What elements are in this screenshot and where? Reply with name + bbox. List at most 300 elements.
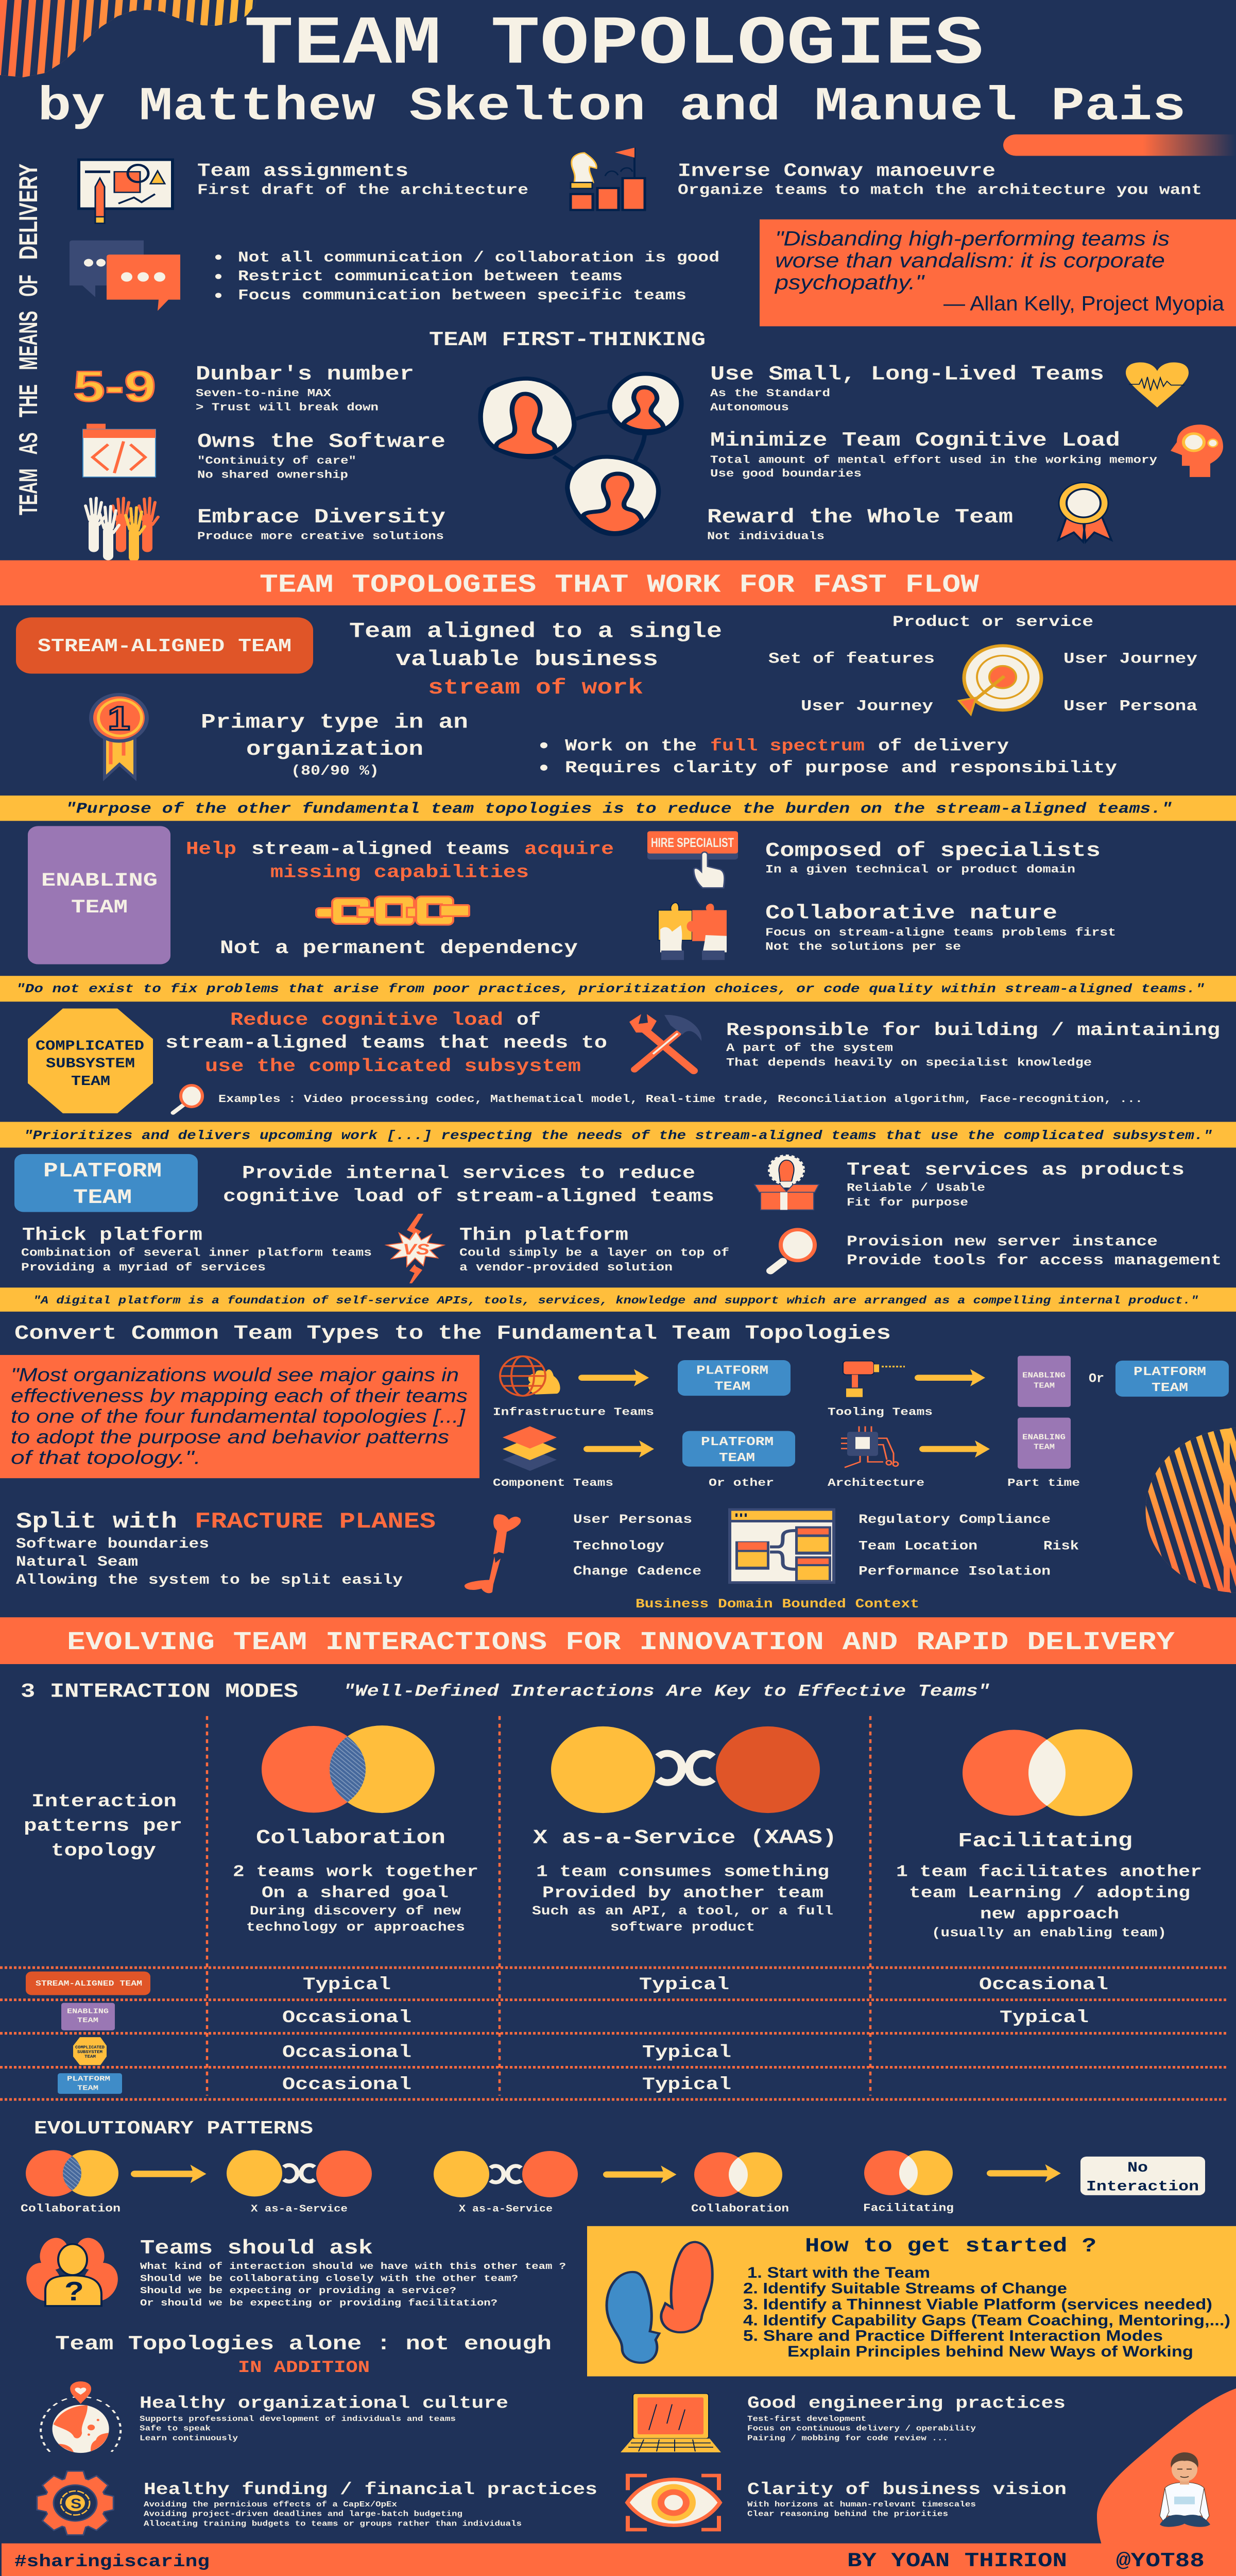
text: team assignments: Team assignments [197, 161, 408, 182]
panel: convert common team types [0, 1322, 1236, 1612]
labels around target: User Persona [1063, 697, 1197, 715]
callout: Allan Kelly quote [760, 219, 1236, 326]
table row: enabling: Occasional [282, 2008, 411, 2028]
text: delivery bullets: Requires clarity of purpose and responsibility [565, 758, 1117, 777]
text: thin platform: Could simply be a layer on top of [459, 1247, 729, 1260]
text: teams should ask [140, 2237, 566, 2309]
icon: connected people [480, 374, 681, 534]
text: primary type [201, 711, 468, 778]
table row: platform [58, 2073, 731, 2095]
text: complicated definition: stream-aligned teams that needs to [165, 1032, 607, 1053]
text: healthy funding: Healthy funding / financial practices [144, 2480, 597, 2500]
text: treat services as products [847, 1160, 1184, 1209]
list of steps [743, 2264, 1230, 2360]
text: teams should ask: Teams should ask [140, 2237, 373, 2260]
text: owns the software [197, 430, 445, 482]
icon: versus burst [386, 1214, 444, 1283]
vertical heading: DELIVERY [13, 163, 43, 260]
icon: gear with coin: S [71, 2496, 81, 2512]
labels around target: Set of features [768, 650, 935, 668]
labels around target: User Journey [801, 697, 933, 715]
text: dunbar: Seven-to-nine MAX [196, 387, 332, 400]
quote band: purpose [0, 795, 1236, 821]
quote band: prioritizes [0, 1122, 1236, 1148]
labels right of flow icon: Team Location [859, 1539, 977, 1554]
labels row two: Or other [709, 1477, 774, 1489]
text: dunbar: Dunbar's number [196, 363, 414, 385]
platform badge small: TEAM [1152, 1381, 1188, 1395]
quote band: purpose: "Purpose of the other fundamental team topologies is to reduce the burden on the stream-aligned teams." [65, 801, 1172, 818]
text: facilitating: (usually an enabling team) [932, 1926, 1166, 1940]
table row: platform: Typical [642, 2075, 731, 2095]
text: reward the whole team: Not individuals [707, 530, 825, 543]
text: cognitive load [710, 429, 1157, 480]
list of steps: 5. Share and Practice Different Interaction Modes [743, 2327, 1163, 2345]
text: collaboration [233, 1826, 478, 1935]
icon: broken bone [465, 1514, 521, 1593]
labels right of flow icon: Regulatory Compliance [859, 1513, 1051, 1527]
icon: chat bubbles [70, 241, 180, 311]
labels row two: Architecture [828, 1477, 924, 1489]
text: small long-lived teams: As the Standard [710, 387, 830, 400]
text: treat services as products: Treat services as products [847, 1160, 1184, 1180]
text: delivery bullets: of delivery [878, 737, 1009, 756]
table row: platform: TEAM [77, 2084, 98, 2092]
arrow: infrastructure to platform [578, 1369, 649, 1386]
heading: not enough: Team Topologies alone : not enough [55, 2332, 552, 2355]
section banner [0, 1617, 1236, 1664]
text: stream-aligned definition [349, 619, 722, 700]
table row: enabling: ENABLING [67, 2007, 109, 2015]
text: small long-lived teams: Autonomous [710, 401, 789, 414]
text: collaboration: On a shared goal [262, 1884, 449, 1902]
icon: magnifier [770, 1230, 815, 1271]
heading: interaction modes [21, 1680, 990, 1703]
text: owns the software: "Continuity of care" [197, 455, 356, 467]
text: healthy culture: Supports professional development of individuals and teams [140, 2415, 456, 2424]
text: healthy funding: Avoiding the pernicious effects of a CapEx/OpEx [144, 2500, 397, 2509]
icon: chain [316, 896, 469, 925]
enabling team badge: ENABLING [41, 870, 158, 892]
icon: laptop [621, 2394, 721, 2452]
text: engineering practices: Good engineering practices [747, 2394, 1066, 2413]
callout: organizations quote [0, 1355, 479, 1478]
icon: circuit chip [841, 1426, 898, 1467]
text: thick platform [21, 1225, 372, 1274]
quote band: prioritizes: "Prioritizes and delivers upcoming work [...] respecting the needs of the stream-aligned teams that use the complicated subsystem." [24, 1129, 1212, 1143]
pattern labels: Collaboration [691, 2202, 789, 2215]
label: bounded context: Business Domain Bounded Context [636, 1597, 919, 1612]
text: delivery bullets [540, 737, 1117, 777]
table row: stream-aligned: STREAM-ALIGNED TEAM [36, 1979, 142, 1988]
row title: interaction patterns: Interaction [31, 1791, 177, 1812]
text: collaboration: Collaboration [256, 1826, 445, 1849]
text: embrace diversity: Embrace Diversity [197, 506, 445, 529]
panel: how to get started [587, 2226, 1236, 2376]
vertical heading: MEANS [13, 311, 43, 370]
text: responsible for building: A part of the system [726, 1042, 893, 1055]
labels row one: Tooling Teams [828, 1406, 933, 1419]
text: primary type: Primary type in an [201, 711, 468, 734]
text: fracture planes: Natural Seam [16, 1554, 138, 1570]
labels around target: User Journey [1063, 650, 1197, 668]
panel: evolving team interactions [0, 1617, 1236, 2099]
labels left of flow icon: Technology [573, 1539, 664, 1554]
icon: healthy culture globe [41, 2381, 121, 2453]
section banner: EVOLVING TEAM INTERACTIONS FOR INNOVATION AND RAPID DELIVERY [67, 1628, 1175, 1657]
labels right of flow icon [859, 1513, 1079, 1579]
pattern: x-as-a-service to collaboration [434, 2151, 782, 2197]
text: collaborative nature: Collaborative nature [765, 902, 1057, 924]
complicated subsystem team badge: SUBSYSTEM [46, 1056, 135, 1072]
text: complicated definition: use the complicated subsystem [205, 1056, 581, 1077]
row title: interaction patterns: topology [51, 1840, 156, 1861]
quote band: do not exist: "Do not exist to fix problems that arise from poor practices, prioritization choices, or code quality within stream-aligned teams." [16, 982, 1205, 996]
subtitle: by Matthew Skelton and Manuel Pais [38, 81, 1186, 134]
enabling team badge: TEAM [71, 897, 128, 919]
table row: stream-aligned: Typical [639, 1975, 729, 1995]
icon: number one medal [91, 694, 147, 778]
text: provision [847, 1233, 1222, 1269]
text: facilitating: new approach [980, 1905, 1119, 1923]
labels right of flow icon: Performance Isolation [859, 1565, 1051, 1579]
platform badge small [682, 1431, 795, 1467]
table row: platform: PLATFORM [67, 2075, 110, 2083]
text: composed of specialists: In a given technical or product domain [765, 863, 1075, 876]
text: owns the software: Owns the Software [197, 430, 445, 453]
quote band: digital platform [0, 1287, 1236, 1312]
table row: stream-aligned [26, 1972, 1108, 1995]
list of steps: Explain Principles behind New Ways of Working [787, 2343, 1193, 2360]
text: composed of specialists [765, 839, 1101, 876]
enabling badge small: TEAM [1034, 1443, 1055, 1451]
text: embrace diversity [197, 506, 445, 543]
text: thin platform [459, 1225, 729, 1274]
icon: whiteboard [79, 160, 173, 223]
labels left of flow icon: User Personas [573, 1513, 692, 1527]
text: fracture planes: Software boundaries [16, 1536, 209, 1552]
text: complicated definition: Reduce cognitive load [230, 1010, 503, 1030]
text: healthy culture: Learn continuously [140, 2434, 238, 2443]
heading: not enough: IN ADDITION [238, 2358, 370, 2377]
table row: enabling: TEAM [77, 2016, 98, 2025]
text: thin platform: a vendor-provided solution [459, 1262, 673, 1274]
callout: organizations quote: "Most organizations would see major gains in [11, 1364, 459, 1385]
text: reward the whole team: Reward the Whole Team [707, 506, 1013, 529]
diagram: x as a service [551, 1726, 820, 1813]
text: communication bullets: Focus communication between specific teams [238, 287, 686, 304]
callout: organizations quote: to one of the four fundamental topologies [...] [11, 1405, 466, 1427]
icon: product box with bulb [754, 1156, 819, 1210]
text: communication bullets: Restrict communication between teams [238, 268, 623, 285]
text: teams should ask: What kind of interaction should we have with this other team ? [140, 2262, 566, 2273]
icon: folder flow window [728, 1509, 835, 1584]
icon: footprints [607, 2242, 712, 2363]
heading: EVOLUTIONARY PATTERNS [34, 2118, 313, 2139]
text: small long-lived teams [710, 363, 1104, 414]
text: facilitating: team Learning / adopting [909, 1884, 1190, 1902]
icon: raised hands [85, 498, 158, 557]
arrow: component to platform [583, 1440, 654, 1458]
text: provision: Provide tools for access management [847, 1252, 1222, 1269]
vertical heading: TEAM [13, 468, 43, 515]
icon: team with question: ? [64, 2277, 84, 2307]
arrow: architecture to enabling [919, 1440, 990, 1458]
labels left of flow icon [573, 1513, 701, 1579]
text: thick platform: Thick platform [22, 1225, 202, 1246]
text: x as a service [532, 1826, 837, 1935]
labels right of flow icon: Risk [1043, 1539, 1079, 1554]
text: fracture planes: Allowing the system to be split easily [16, 1572, 403, 1588]
text: cognitive load: Use good boundaries [710, 468, 862, 480]
vertical heading: OF [13, 275, 43, 297]
panel: team topologies that work for fast flow [0, 561, 1236, 1312]
labels row two [493, 1477, 1080, 1489]
heading: Convert Common Team Types to the Fundamental Team Topologies [14, 1322, 891, 1345]
table row: stream-aligned: Occasional [979, 1975, 1108, 1995]
text: stream-aligned definition: stream of work [428, 675, 643, 700]
text: collaborative nature: Not the solutions per se [765, 941, 961, 954]
pattern: collaboration to x-as-a-service [26, 2150, 372, 2197]
text: healthy funding: Avoiding project-driven deadlines and large-batch budgeting [144, 2510, 462, 2518]
text: owns the software: No shared ownership [197, 469, 348, 482]
labels row one [493, 1406, 933, 1419]
text: communication bullets: Not all communication / collaboration is good [238, 249, 719, 266]
platform team badge: TEAM [73, 1186, 132, 1210]
pattern labels: X as-a-Service [459, 2204, 553, 2215]
icon: team with question [22, 2235, 123, 2307]
platform badge small: TEAM [714, 1380, 750, 1394]
text: x as a service: X as-a-Service (XAAS) [533, 1826, 837, 1849]
text: dunbar: > Trust will break down [196, 401, 379, 414]
platform team badge: PLATFORM [43, 1160, 162, 1183]
text: responsible for building: That depends heavily on specialist knowledge [726, 1056, 1092, 1070]
text: cognitive load: Minimize Team Cognitive Load [710, 429, 1120, 452]
text: x as a service: Such as an API, a tool, or a full [532, 1904, 833, 1919]
table row: enabling [61, 2003, 1089, 2030]
decorative stripes: top-left [0, 0, 256, 77]
text: enabling definition [186, 839, 614, 883]
icon: rosette [1058, 483, 1111, 542]
text: engineering practices [747, 2394, 1066, 2443]
text: complicated definition: of [517, 1010, 541, 1030]
text: platform definition: cognitive load of stream-aligned teams [223, 1187, 714, 1207]
text: fracture planes: FRACTURE PLANES [195, 1510, 436, 1535]
text: cognitive load: Total amount of mental effort used in the working memory [710, 454, 1157, 467]
table row: complicated subsystem: COMPLICATED [75, 2045, 105, 2050]
text: inverse conway: Inverse Conway manoeuvre [678, 161, 995, 182]
text: clarity of vision: With horizons at human-relevant timescales [747, 2500, 976, 2509]
platform badge small: PLATFORM [696, 1364, 768, 1378]
icon: target with arrow [959, 646, 1041, 715]
complicated subsystem team badge [28, 1009, 153, 1113]
text: x as a service: 1 team consumes something [536, 1862, 829, 1882]
title: TEAM TOPOLOGIES [244, 6, 984, 83]
icon: small magnifier [173, 1086, 202, 1113]
callout: organizations quote: effectiveness by mapping each of their teams [11, 1385, 468, 1406]
section banner: TEAM TOPOLOGIES THAT WORK FOR FAST FLOW [260, 570, 980, 600]
icon: 5-9: 5-9 [73, 362, 156, 410]
enabling badge small: ENABLING [1022, 1433, 1066, 1442]
text: healthy funding [144, 2480, 597, 2528]
platform badge small: PLATFORM [701, 1435, 774, 1449]
enabling badge small: TEAM [1034, 1382, 1055, 1390]
text: collaborative nature: Focus on stream-aligne teams problems first [765, 927, 1116, 939]
heading: interaction modes: "Well-Defined Interactions Are Key to Effective Teams" [343, 1682, 990, 1701]
table row: complicated subsystem: TEAM [84, 2055, 96, 2059]
text: healthy culture [140, 2394, 508, 2443]
text: clarity of vision [747, 2480, 1067, 2518]
text: collaboration: technology or approaches [246, 1921, 465, 1935]
text: collaborative nature [765, 902, 1116, 954]
diagram: collaboration [262, 1725, 435, 1813]
quote band: do not exist [0, 976, 1236, 1002]
icon: heart [1126, 362, 1189, 408]
text: communication bullets [215, 249, 719, 304]
icon: versus burst: VS [403, 1241, 430, 1258]
text: fracture planes [16, 1510, 436, 1588]
decorative stripes: right circle [1146, 1428, 1236, 1593]
diagram: facilitating [963, 1730, 1132, 1816]
text: collaboration: During discovery of new [250, 1904, 461, 1919]
icon: code window [83, 423, 156, 477]
pattern labels: Collaboration [21, 2202, 121, 2215]
row title: interaction patterns [24, 1791, 182, 1861]
heading: interaction modes: 3 INTERACTION MODES [21, 1680, 298, 1703]
text: team assignments [197, 161, 528, 199]
text: engineering practices: Focus on continuous delivery / operability [747, 2425, 976, 2433]
icon: hammer and wrench [629, 1014, 701, 1071]
text: thick platform: Combination of several inner platform teams [21, 1247, 372, 1260]
callout: Allan Kelly quote: psychopathy." [774, 271, 925, 294]
callout: Allan Kelly quote: worse than vandalism: it is corporate [775, 249, 1165, 272]
text: thin platform: Thin platform [459, 1225, 628, 1246]
platform team badge [14, 1154, 198, 1212]
text: enabling definition: acquire [524, 839, 614, 859]
text: teams should ask: Should we be expecting or providing a service? [140, 2285, 456, 2296]
text: enabling definition: stream-aligned teams [251, 839, 510, 859]
table row: stream-aligned: Typical [303, 1975, 391, 1995]
vertical heading [13, 163, 43, 515]
pattern: facilitating to no interaction: Interaction [1086, 2179, 1199, 2195]
text: provision: Provision new server instance [847, 1233, 1158, 1250]
text: composed of specialists: Composed of specialists [765, 839, 1101, 862]
text: healthy culture: Safe to speak [140, 2425, 211, 2433]
list of steps: 4. Identify Capability Gaps (Team Coaching, Mentoring,...) [743, 2312, 1230, 2329]
icon: puzzle hands [658, 903, 727, 960]
icon: hire specialist button [647, 831, 738, 888]
enabling badge small [1018, 1356, 1071, 1407]
pattern: facilitating to no interaction: No [1127, 2160, 1148, 2176]
labels row two: Part time [1007, 1477, 1080, 1489]
text: x as a service: software product [610, 1921, 755, 1935]
complicated subsystem team badge: TEAM [71, 1073, 110, 1089]
icon: stacked diamonds [503, 1426, 557, 1471]
callout: organizations quote: to adopt the purpose and behavior patterns [11, 1426, 449, 1448]
text: reward the whole team [707, 506, 1013, 543]
footer band [2, 2544, 1236, 2576]
text: primary type: organization [246, 738, 423, 761]
text: delivery bullets: full spectrum [710, 737, 865, 756]
callout: organizations quote: of that topology.". [11, 1447, 201, 1468]
icon: number one medal: 1 [108, 700, 130, 737]
text: stream-aligned definition: valuable business [396, 647, 658, 672]
stream-aligned team badge: STREAM-ALIGNED TEAM [38, 636, 291, 657]
labels row two: Component Teams [493, 1477, 613, 1489]
labels left of flow icon: Change Cadence [573, 1565, 701, 1579]
vertical heading: THE [13, 384, 43, 417]
text: treat services as products: Reliable / Usable [847, 1182, 985, 1195]
text: treat services as products: Fit for purpose [847, 1196, 968, 1209]
text: embrace diversity: Produce more creative solutions [197, 530, 444, 543]
text: enabling definition: missing capabilities [270, 862, 529, 883]
text: fracture planes: Split with [16, 1510, 177, 1535]
text: engineering practices: Test-first development [747, 2415, 866, 2424]
text: clarity of vision: Clarity of business vision [747, 2480, 1067, 2500]
text: examples: Examples : Video processing codec, Mathematical model, Real-time trade, Reconciliation algorithm, Face-recognition, ... [218, 1093, 1143, 1106]
table row: complicated subsystem: Typical [642, 2043, 731, 2062]
table row: complicated subsystem: SUBSYSTEM [77, 2050, 102, 2055]
icon: eye [627, 2476, 720, 2530]
text: collaboration: 2 teams work together [233, 1862, 478, 1882]
footer band: BY YOAN THIRION [847, 2549, 1067, 2572]
text: enabling definition: Help [186, 839, 236, 859]
platform badge small [678, 1360, 791, 1396]
enabling badge small: ENABLING [1022, 1371, 1066, 1380]
heading: How to get started ? [805, 2234, 1096, 2258]
decorative pill [1003, 134, 1236, 156]
stream-aligned team badge [16, 617, 313, 674]
vertical heading: AS [13, 432, 43, 454]
table row: complicated subsystem: Occasional [282, 2043, 411, 2062]
list of steps: 2. Identify Suitable Streams of Change [743, 2280, 1067, 2297]
pattern labels: X as-a-Service [251, 2204, 348, 2215]
labels around target [768, 613, 1197, 715]
list of steps: 3. Identify a Thinnest Viable Platform (services needed) [743, 2296, 1212, 2313]
footer band: #sharingiscaring [14, 2552, 210, 2571]
icon: chess knight and bars [571, 148, 645, 210]
text: stream-aligned definition: Team aligned to a single [349, 619, 722, 643]
footer band: @YOT88 [1116, 2549, 1205, 2572]
table row: complicated subsystem [73, 2037, 731, 2065]
text: healthy culture: Healthy organizational culture [140, 2394, 508, 2413]
text: delivery bullets: Work on the [565, 737, 697, 756]
arrow: tooling to enabling [915, 1369, 985, 1386]
quote band: digital platform: "A digital platform is a foundation of self-service APIs, tools, services, knowledge and support which are arranged as a compelling internal product." [33, 1295, 1198, 1307]
pattern: facilitating to no interaction [864, 2150, 1205, 2195]
section banner [0, 561, 1236, 605]
table row: enabling: Typical [1000, 2008, 1089, 2028]
heading: not enough [55, 2332, 552, 2377]
text: engineering practices: Pairing / mobbing for code review ... [747, 2434, 948, 2443]
callout: Allan Kelly quote: "Disbanding high-performing teams is [775, 227, 1170, 250]
labels row one: Infrastructure Teams [493, 1406, 654, 1419]
complicated subsystem team badge: COMPLICATED [36, 1038, 144, 1054]
icon: gear with coin [37, 2471, 113, 2535]
text: healthy funding: Allocating training budgets to teams or groups rather than individuals [144, 2520, 522, 2528]
table row: platform: Occasional [282, 2075, 411, 2095]
heading: team first-thinking: TEAM FIRST-THINKING [429, 328, 706, 351]
decorative orange corner blob [1097, 2388, 1236, 2546]
text: not a permanent dependency: Not a permanent dependency [220, 938, 578, 959]
text: teams should ask: Or should we be expecting or providing facilitation? [140, 2298, 497, 2309]
text: inverse conway: Organize teams to match the architecture you want [678, 182, 1202, 199]
platform badge small [1115, 1361, 1229, 1397]
pattern labels [21, 2202, 954, 2215]
icon: infrastructure globe [500, 1356, 560, 1396]
text: responsible for building [726, 1020, 1220, 1070]
icon: drill [843, 1361, 905, 1397]
